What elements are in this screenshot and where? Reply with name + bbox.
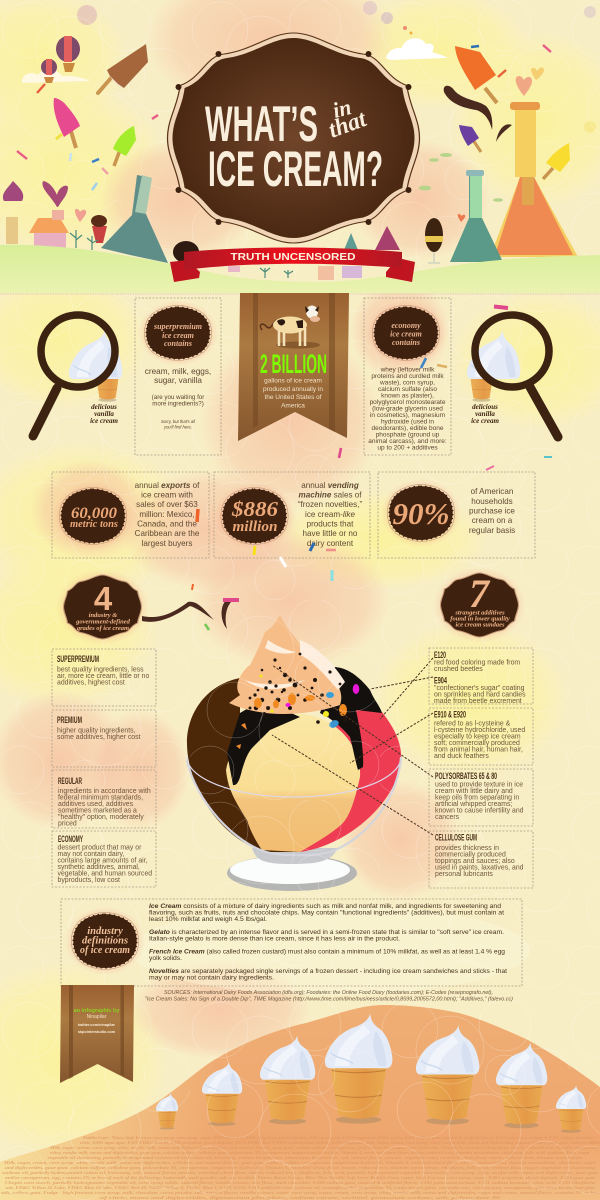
panel: E120 and E904: "confectioner's sugar" coating — [434, 685, 525, 692]
superpremium ingredients: cream, milk, eggs, — [145, 367, 211, 376]
center ribbon: 2 billion gallons: the United States of — [264, 394, 322, 401]
definitions text: French Ice Cream (also called frozen custard) must also contain a minimum of 10% milkfat, as well as at least 1.4 % egg — [149, 948, 506, 956]
left magnifier with vanilla cone — [33, 315, 122, 436]
dark mini sundae behind ribbon — [173, 241, 199, 263]
center ribbon: 2 billion gallons — [238, 293, 349, 441]
badge: 7 additives: found in lower quality — [450, 616, 510, 622]
panel: economy grade: vegetable, and human sourced — [58, 870, 152, 878]
panel: polysorbates: known to cause infertility and — [435, 808, 524, 814]
economy ingredients: known as plaster), — [381, 392, 434, 400]
chocolate scoop — [187, 678, 300, 852]
sources: SOURCES: International Dairy Foods Association (idfa.org); Foodaries: the Online Food Diary (foodaries.com); E-Codes (resepnografo.net), — [164, 990, 493, 996]
panel: regular grade — [52, 770, 156, 828]
panel: polysorbates: POLYSORBATES 65 & 80 — [435, 771, 497, 781]
panel: cellulose gum: used in paints, laxatives, and — [435, 864, 524, 872]
castle tower — [3, 181, 23, 244]
panel: superpremium grade: additives, highest cost — [57, 680, 125, 686]
economy ingredients: up to 200 + additives — [377, 444, 438, 452]
right sundae — [425, 218, 443, 263]
superpremium badge — [138, 300, 218, 366]
superpremium badge: ice cream — [162, 331, 194, 340]
stat: vending sales: “frozen novelties,” — [298, 500, 362, 509]
definitions text: Ice Cream consists of a mixture of dairy ingredients such as milk and nonfat milk, and ingredients for sweetening and — [149, 903, 502, 910]
stat: exports: metric tons — [70, 519, 118, 530]
panel: polysorbates: used to provide texture in ice — [435, 782, 523, 788]
orange popsicle — [455, 46, 497, 103]
panel: E910 and E920 — [429, 708, 533, 765]
badge: 7 additives: strangest additives — [454, 610, 505, 616]
panel: regular grade: ingredients in accordance with — [58, 788, 151, 795]
leaves — [419, 153, 503, 202]
dotted callout lines from sundae to additives — [272, 658, 433, 835]
credit ribbon — [60, 985, 134, 1083]
icon: cow — [260, 306, 320, 348]
panel: cellulose gum: CELLULOSE GUM — [435, 832, 477, 842]
panel: regular grade: "healthy" option, moderately — [58, 814, 144, 821]
tiny ingredient list text on hill: Milk, sugar, cream, corn syrup, whey, acrylic milk, mono and diglycerides, cellulose, and natural flavors, guar gum, sodium sulfate, carrageenan, polysorbate 80, magnesium hydroxide, Vitamin A, enriched wheat flour, niacin, reduced iron, thiamin mononitrate — [49, 1145, 600, 1150]
badge: 4 grades: industry & — [89, 612, 117, 619]
badge: 4 grades — [56, 569, 149, 645]
economy ingredients: calcium sulfate (also — [378, 386, 437, 393]
swirl arrow from badge 4 — [142, 598, 233, 629]
red ribbon banner: TRUTH UNCENSORED — [230, 252, 356, 263]
panel: E120 and E904: on sprinkles and hard candies — [434, 692, 526, 698]
superpremium badge: contains — [164, 339, 192, 348]
industry definitions badge — [65, 907, 145, 975]
badge: 4 grades: 4 — [94, 580, 113, 617]
tiny ingredient list text on hill: Dublin Gum - Water, high fructose corn syrup, corn syrup, sugar, E920 ultra-zeal, E405 propylene glycol alginate, E412 guar gum, E413 tragacanth, E414 acacia, E466 sodium gum, natural & artificial flavor, E202 potassium sorbate & E211 sodium benzoate — [82, 1135, 593, 1140]
definitions text: Novelties are separately packaged single servings of a frozen dessert - including ice cream sandwiches and sticks - that — [149, 968, 507, 975]
panel: premium grade — [52, 710, 156, 767]
stat: exports: annual exports of — [135, 481, 200, 490]
panel: polysorbates: keep oils from separating in — [435, 794, 519, 802]
panel: E910 and E920: soft; commercially produced — [434, 740, 520, 747]
panel: E120 and E904: crushed beetles — [434, 666, 483, 673]
panel: E120 and E904: red food coloring made from — [434, 660, 520, 666]
panel: economy grade: dessert product that may or — [58, 844, 142, 852]
dark syrup swirls — [444, 86, 512, 142]
panel: superpremium contents — [135, 298, 221, 455]
panel: regular grade: sometimes marketed as a — [58, 808, 137, 814]
stat: vending sales — [214, 472, 370, 558]
tiny ingredient list text on hill: soybean oil, partially hydrogenated cotton oil, leavening, salt, natural flavor, annatto, enriched wheat flour, niacin, reduced iron, riboflavin, folic acid, partially hydrogenated vegetable shortening, corn syrup, whey, nonfat milk, mono and diglycerides, guar gum — [1, 1170, 598, 1175]
definitions text: flavoring, such as fruits, nuts and chocolate chips. May contain "functional ingredients" (additives), but must contain at — [149, 910, 504, 916]
tiny ingredient list text on hill: vegetable oil shortening, partially hydrogenated soybean oil and cotton oil, leavening, sodium bicarbonate, ammonium bicarbonate, salt, natural flavor, annatto, vegetable color, enriched wheat flour, niacin, reduced iron, thiamin mononitrate — [48, 1155, 583, 1160]
tiny ingredient list text on hill: sait, FD&C Yellow #5 Lake, FD&C Blue #1 lake, FD&C Red 40, FD&C Yellow 6, FD&C Blue 1, E129, E133, E110 artificial color, soybean oil, monoglycerides, polysorbate 80, confectioners glaze, carnauba wax, calcium gum, carrageenan, guar gum, locust bean gum — [4, 1185, 595, 1190]
panel: economy grade: byproducts, low cost — [58, 877, 120, 884]
panel: cellulose gum: toppings and sauces; also — [435, 858, 515, 865]
tiny ingredient list text on hill: and diglycerides, guar gum, calcium sulfate, cellulose gum, polysorbate 80, carrageenan, magnesium hydroxide, Vitamin A, enriched wheat flour, niacin, reduced iron, thiamin mononitrate, riboflavin, folic acid, soybean flour, sugar, vegetable oil shortening — [5, 1165, 595, 1170]
credit ribbon: skpointerstudio.com — [78, 1030, 116, 1034]
sundae illustration — [187, 615, 401, 891]
badge: 4 grades: grades of ice cream — [76, 625, 129, 632]
yellow popsicle — [543, 143, 570, 179]
economy ingredients: hydroxide (used in — [381, 418, 434, 426]
panel: E120 and E904: E120 — [434, 650, 446, 660]
panel: cellulose gum: commercially produced — [435, 852, 506, 858]
economy ingredients: proteins and curdled milk — [371, 373, 444, 380]
panel: superpremium grade: air, more ice cream, little or no — [57, 673, 149, 680]
panel: economy contents — [364, 298, 451, 455]
panel: E910 and E920: especially to keep ice cream — [434, 734, 521, 740]
economy badge: economy — [391, 321, 421, 330]
badge: 7 additives: 7 — [469, 571, 491, 616]
superpremium ingredients: (are you waiting for — [152, 394, 204, 401]
economy badge: contains — [392, 338, 420, 347]
vanilla scoop — [226, 714, 360, 852]
tiny ingredient list text on hill: salt, sodium gum. Fudge - high fructose corn syrup, milk, chocolate, cocoa powder, salt, natural flavor, vanilla extract, water, corn syrup, sugar, cream, corn syrup, whey, nonfat milk, mono and diglycerides, sugar and cream, natural flavor, contains 2% or less — [0, 1190, 600, 1195]
panel: cellulose gum: personal lubricants — [435, 871, 493, 878]
tiny ingredient list text on hill: of citric, mono and diglycerides, dipotassium phosphate, sodium citrate, sorbitol, potassium sorbate, salt, polysorbate 80 — [100, 1195, 500, 1200]
panel: E910 and E920: E910 & E920 — [434, 710, 466, 720]
panel: economy grade: may not contain dairy, — [58, 851, 124, 858]
left magnifier with vanilla cone: ice cream — [90, 417, 118, 425]
right magnifier with vanilla cone: vanilla — [475, 410, 495, 418]
tiny ingredient list text on hill: and/or carrageenan, egg, contains 2% or less of each of the following: buttermilk, malt powder, salt, soy lecithin, Flavor Burst Syrups, Blue Moo Vanilla Soft Serve Bubble Gum, water, high fructose corn syrup, sugar, E405 propylene glycol alginate, E412 guar gum — [5, 1175, 595, 1180]
loose sprinkles — [192, 306, 552, 630]
hearts — [75, 68, 544, 222]
right cloud and flowers — [386, 26, 448, 60]
stat: vending sales: products that — [307, 520, 354, 528]
panel: premium grade: higher quality ingredients, — [57, 728, 136, 734]
superpremium ingredients — [145, 367, 211, 430]
panel: superpremium grade: SUPERPREMIUM — [57, 654, 99, 664]
left flask — [101, 175, 168, 263]
panel: industry definitions — [61, 899, 522, 986]
panel: E910 and E920: and duck feathers — [434, 753, 489, 760]
stat: 90 percent: households — [471, 497, 513, 506]
left magnifier with vanilla cone: vanilla — [94, 410, 114, 418]
panel: regular grade: REGULAR — [58, 776, 82, 786]
big orange flask — [490, 102, 578, 257]
definitions text: yolk solids. — [149, 955, 182, 962]
house — [29, 210, 69, 248]
panel: economy grade: contains large amounts of air, — [58, 858, 148, 864]
pink popsicle — [54, 98, 80, 148]
stat: 90 percent: of American — [471, 487, 513, 496]
economy ingredients: (low-grade glycerin used — [372, 406, 443, 412]
panel: economy grade: synthetic additives, animal, — [58, 864, 140, 871]
stat: exports: 60,000 — [71, 505, 117, 522]
row of growing ice cream cones — [156, 1010, 586, 1133]
center ribbon: 2 billion gallons: gallons of ice cream — [264, 378, 322, 384]
chocolate syrup — [227, 667, 382, 785]
definitions text: Gelato is characterized by an intense flavor and is served in a semi-frozen state that is similar to "soft serve" ice cream. — [149, 929, 504, 936]
triangle trees — [344, 226, 400, 250]
panel: economy grade — [52, 831, 156, 887]
credit ribbon: twitter.com/ninapilar — [78, 1023, 115, 1027]
panel: polysorbates: cancers — [435, 814, 460, 821]
panel: E120 and E904 — [429, 648, 533, 705]
right magnifier with vanilla cone: delicious — [472, 403, 498, 411]
title text: in — [330, 94, 354, 123]
center ribbon: 2 billion gallons: 2 BILLION — [260, 349, 327, 379]
sundae glass base — [227, 848, 357, 891]
small flower plants — [70, 230, 293, 278]
panel: premium grade: PREMIUM — [57, 715, 82, 725]
teal flask — [450, 170, 503, 262]
right magnifier with vanilla cone: ice cream — [471, 417, 499, 425]
superpremium badge: superpremium — [153, 322, 202, 331]
stat: exports: million: Mexico, — [139, 510, 195, 519]
tiny ingredient list text on hill: Milk, sugar, cream, corn syrup, whey, acrylic milk, mono and diglycerides, cellulose, and natural flavors, guar gum, sodium sulfate, carrageenan, magnesium hydroxide, Vitamin A, enriched wheat flour, niacin, reduced iron, thiamin mononitrate, riboflavin, sugar — [3, 1160, 597, 1165]
stat: exports: largest buyers — [142, 539, 192, 548]
badge: 4 grades: government-defined — [75, 618, 131, 626]
economy badge: ice cream — [390, 330, 422, 338]
title text: ICE CREAM? — [208, 141, 383, 197]
panel: cellulose gum: provides thickness in — [435, 845, 499, 852]
credit ribbon: an infographic by — [74, 1008, 120, 1014]
stat: exports: Canada, and the — [137, 520, 197, 528]
purple popsicle — [459, 125, 481, 152]
title text: WHAT’S — [205, 96, 318, 152]
economy ingredients: deodorants), edible bone — [372, 425, 444, 432]
stat: 90 percent: regular basis — [469, 526, 515, 535]
superpremium ingredients: Sorry, but that's all — [161, 419, 196, 424]
left sundae — [91, 215, 107, 243]
definitions text: least 10% milkfat and weigh 4.5 lbs/gal. — [149, 916, 267, 923]
definitions text: Italian-style gelato is more dense than ice cream, since it has less air in the product. — [149, 936, 400, 942]
dotted divider — [0, 293, 600, 295]
stat: vending sales: have little or no — [303, 529, 358, 538]
panel: superpremium grade: best quality ingredients, less — [57, 666, 144, 674]
glass bowl rim and outline — [187, 757, 401, 855]
panel: superpremium grade — [52, 649, 156, 706]
sources: "Ice Cream Sales: No Sign of a Double Dip", TIME Magazine (http://www.time.com/time/business/article/0,8599,2005572,00.html); "Additives," (falevo.cc) — [145, 996, 513, 1002]
stat: exports: ice cream with — [141, 490, 193, 500]
definitions text — [149, 903, 507, 982]
sources — [145, 990, 513, 1002]
economy ingredients: waste), corn syrup, — [379, 380, 435, 386]
left magnifier with vanilla cone: delicious — [91, 403, 117, 411]
small buildings behind ribbon — [228, 266, 362, 280]
panel: E120 and E904: made from beetle excrement — [434, 698, 522, 705]
stat: vending sales: dairy content — [307, 539, 354, 548]
title text — [205, 94, 383, 197]
fountain swirl — [42, 181, 68, 207]
stat: vending sales: machine sales of — [298, 490, 362, 500]
stat: 90 percent: purchase ice — [469, 506, 515, 516]
stat: vending sales: $886 — [231, 497, 279, 521]
stat: vending sales: annual vending — [301, 481, 359, 490]
panel: E120 and E904: E904 — [434, 676, 447, 686]
economy ingredients: phosphate (ground up — [376, 432, 440, 438]
center ribbon: 2 billion gallons: produced annually in — [263, 386, 323, 393]
economy ingredients: polyglycerol monostearate — [370, 399, 446, 406]
strawberry scoop — [290, 700, 401, 852]
green hills — [0, 245, 600, 293]
superpremium ingredients: more ingredients?) — [152, 400, 204, 408]
sprinkles and flecks on topping — [236, 653, 359, 749]
stat: vending sales: ice cream-like — [305, 510, 355, 519]
economy ingredients: in cosmetics), magnesium — [370, 412, 445, 419]
chocolate popsicle — [98, 44, 148, 93]
stat: exports: sales of over $63 — [136, 500, 198, 509]
tiny ingredient list text on hill: citric, E905 aqua agar, E327 FD&C Red 40, E405 propylene glycol alginate, E124 FD&C Red 3, E951 carbohydrate blends, E101 riboflavin, milk, sugar, cream, corn syrup, whey, nonfat milk, mono and diglycerides, natural flavors, guar gum, sodium sulfate — [80, 1140, 600, 1145]
stat: 90 percent: cream on a — [472, 516, 513, 525]
panel: E910 and E920: l-cysteine hydrochloride, used — [434, 727, 525, 734]
stat: vending sales: million — [232, 519, 278, 535]
panel: regular grade: federal minimum standards, — [58, 794, 143, 802]
economy ingredients: whey (leftover milk — [380, 366, 435, 374]
stat: exports: Caribbean are the — [135, 529, 200, 538]
economy ingredients: animal carcass), and more: — [368, 438, 447, 445]
header illustrated scene — [0, 26, 600, 294]
tiny ingredient list text on hill — [0, 1135, 600, 1200]
panel: premium grade: some additives, higher cost — [57, 734, 141, 741]
decorative sprinkles in header — [17, 45, 551, 190]
panel: regular grade: additives used, additives — [58, 801, 134, 808]
whipped cream highlights — [245, 640, 345, 690]
panel: polysorbates: cream with little dairy and — [435, 788, 513, 795]
tiny ingredient list text on hill: Chopin corn starch, partially hydrogenated vegetable oil, corn syrup solids, natural flavor, vanilla extract, rice flour, dark chocolate, E466 sodium gum, natural & artificial flavor, E202 potassium sorbate, E211 sodium benzoate, citric acid, E101 riboflavin — [5, 1180, 596, 1185]
stat: 90 percent — [378, 472, 535, 558]
badge: 7 additives — [433, 567, 526, 643]
panel: polysorbates: artificial whipped creams; — [435, 801, 512, 808]
panel: E910 and E920: refered to as l-cysteine & — [434, 720, 511, 728]
whipped topping — [229, 615, 341, 714]
main title badge — [168, 33, 420, 243]
red ribbon banner — [170, 248, 415, 282]
industry definitions badge: definitions — [82, 936, 128, 946]
superpremium ingredients: sugar, vanilla — [154, 376, 202, 385]
panel: E910 and E920: from animal hair, human hair, — [434, 746, 523, 754]
economy ingredients — [368, 366, 447, 452]
stat: exports — [52, 472, 209, 558]
credit ribbon: Ninapilar — [87, 1014, 107, 1020]
panel: economy grade: ECONOMY — [58, 834, 83, 844]
panel: polysorbates — [429, 769, 533, 826]
panel: cellulose gum — [429, 831, 533, 888]
badge: 7 additives: ice cream sundaes — [455, 622, 505, 628]
panel: regular grade: priced — [58, 820, 77, 828]
definitions text: may or may not contain dairy ingredients. — [149, 974, 274, 982]
balloons and left cloud — [22, 36, 90, 83]
industry definitions badge: of ice cream — [80, 945, 130, 956]
economy badge — [366, 300, 446, 366]
tiny ingredient list text on hill: whey, nonfat milk, mono and diglycerides, guar gum, calcium sulfate, cellulose gum, polysorbate 80, carrageenan, magnesium hydroxide, Vitamin A, enriched wheat flour, niacin, reduced iron, thiamin mononitrate, riboflavin, folic acid, soybean flour, sugar — [50, 1150, 591, 1155]
industry definitions badge: industry — [87, 926, 123, 937]
orange hill — [0, 1005, 600, 1200]
superpremium ingredients: you'll find here. — [163, 424, 192, 430]
title text: that — [325, 106, 371, 144]
right magnifier with vanilla cone — [467, 315, 558, 437]
green popsicle — [113, 126, 136, 166]
stat: 90 percent: 90% — [392, 496, 450, 531]
center ribbon: 2 billion gallons: America — [281, 402, 305, 410]
